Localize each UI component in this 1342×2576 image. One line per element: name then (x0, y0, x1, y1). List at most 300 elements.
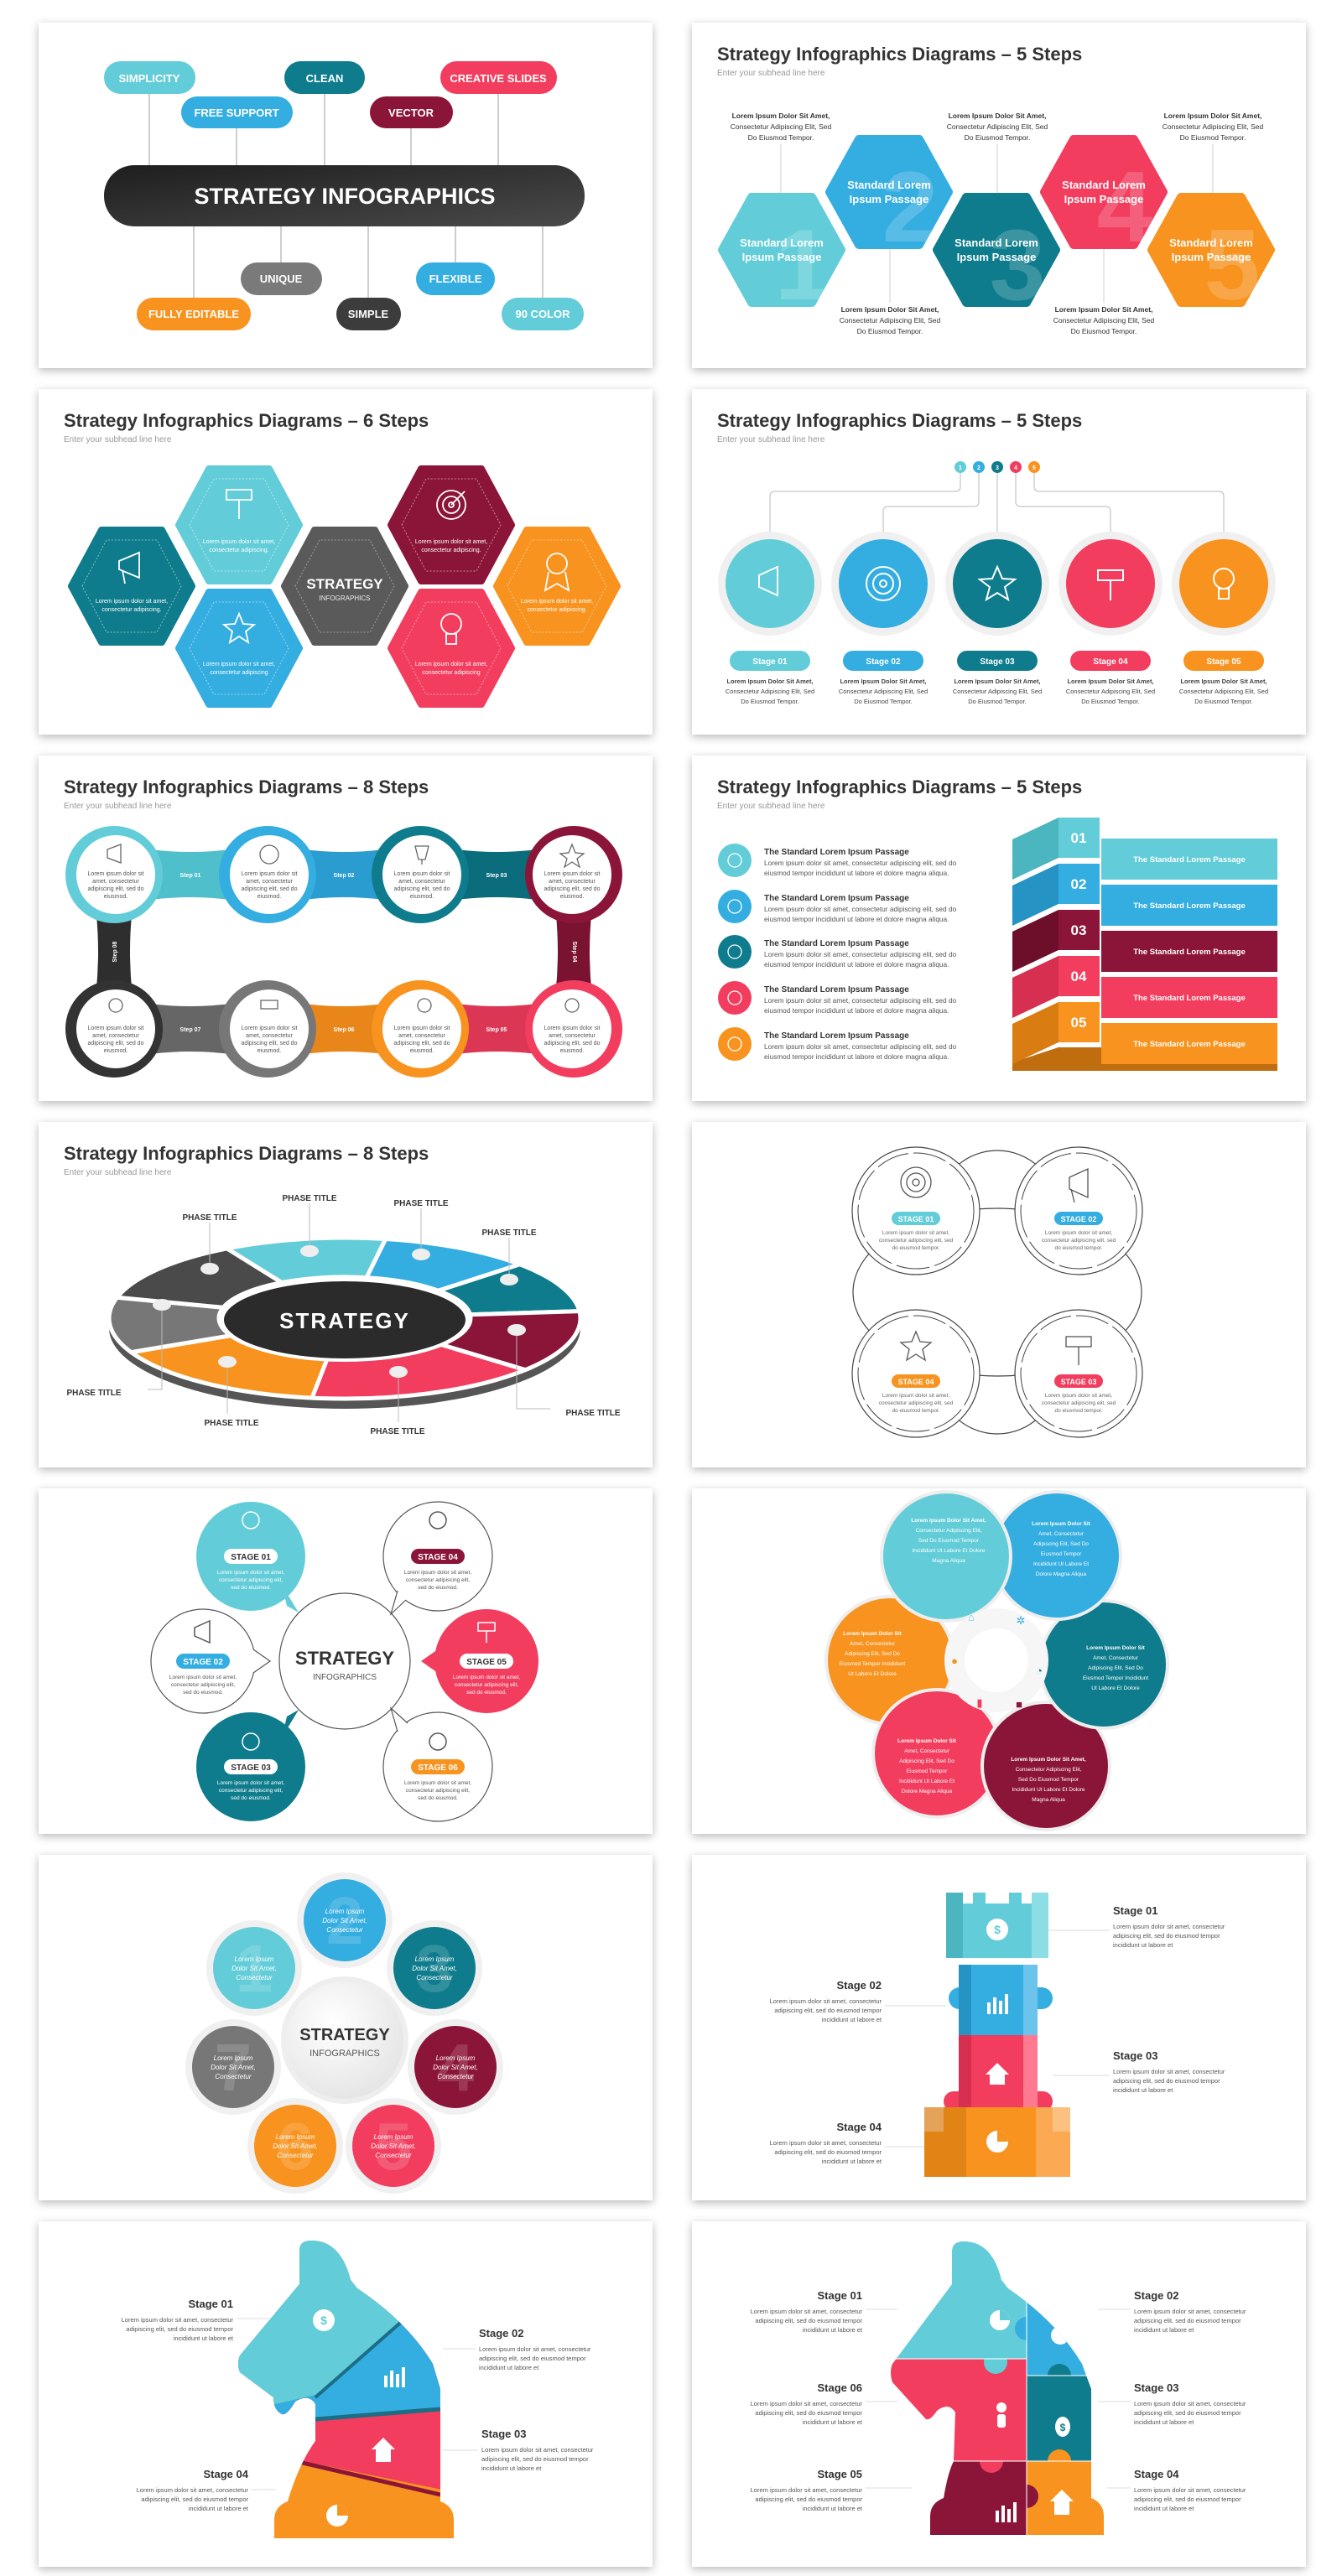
center: strategy (222, 1280, 467, 1360)
slide 10: six overlapping circles (692, 1488, 1306, 1834)
list items: eiusmod tempor incididunt ut labore et dolore magna aliqua. (764, 915, 949, 923)
center circle: STRATEGY (299, 2026, 390, 2044)
list items: Lorem ipsum dolor sit amet, consectetur adipiscing elit, sed do (764, 859, 957, 867)
stage texts: incididunt ut labore et (189, 2505, 249, 2512)
bubble stage 06 (383, 1708, 492, 1821)
petals: Consectetur (277, 2152, 314, 2159)
stage texts: incididunt ut labore et (479, 2364, 539, 2371)
slide 8: outline stages (692, 1122, 1306, 1467)
circle: pink: Adipiscing Elit, Sed Do (899, 1758, 954, 1764)
stage texts: Stage 02 (1134, 2289, 1178, 2302)
hex: pink bulb (391, 592, 512, 704)
connector bands: Step 08 (112, 941, 118, 962)
circle: pink: Eiusmod Tempor (907, 1768, 948, 1774)
circle: orange (826, 1597, 954, 1724)
stage 02: Stage 02 (866, 657, 901, 667)
center circle (281, 1976, 408, 2104)
step circles: Lorem ipsum dolor sit (242, 1026, 298, 1031)
hex: blue star: Lorem ipsum dolor sit amet, (203, 662, 275, 667)
hexagon 3: 3 (990, 209, 1045, 321)
step circles: amet, consectetur (549, 879, 596, 885)
hexagon 1 (722, 197, 841, 321)
bubble stage 02: Lorem ipsum dolor sit amet, (169, 1675, 237, 1680)
circle: dark teal: Eiusmod Tempor Incididunt (1083, 1675, 1148, 1681)
stage 05: Do Eiusmod Tempor. (1194, 698, 1253, 705)
bubble stage 06: Lorem ipsum dolor sit amet, (404, 1780, 471, 1786)
callout texts: Lorem Ipsum Dolor Sit Amet, (841, 305, 939, 314)
hexagon 5 (1152, 197, 1271, 321)
stage texts: adipiscing elit, sed do eiusmod tempor (481, 2455, 589, 2463)
callout texts (731, 112, 1264, 335)
slide 5: 8 steps chain (39, 756, 653, 1101)
stage texts: Lorem ipsum dolor sit amet, consectetur (770, 1997, 882, 2005)
step circles: eiusmod. (410, 894, 434, 900)
title: Enter your subhead line here (64, 1168, 172, 1177)
step circles: eiusmod. (257, 1048, 281, 1054)
circle: orange: Adipiscing Elit, Sed Do (845, 1651, 900, 1657)
stage texts: Lorem ipsum dolor sit amet, consectetur (1134, 2308, 1246, 2315)
stage texts: Lorem ipsum dolor sit amet, consectetur (751, 2486, 863, 2494)
circle: crimson: Lorem Ipsum Dolor Sit Amet, (1011, 1757, 1086, 1763)
petals: Consectetur (416, 1974, 453, 1981)
list items: Lorem ipsum dolor sit amet, consectetur adipiscing elit, sed do (764, 996, 957, 1005)
stage texts: adipiscing elit, sed do eiusmod tempor (1113, 1932, 1220, 1940)
pill: clean (284, 61, 365, 94)
bubble stage 01 (196, 1502, 305, 1613)
bubble stage 04: sed do eiusmod. (418, 1585, 458, 1591)
connector bands (91, 843, 597, 1061)
circle: dark teal (1040, 1601, 1168, 1728)
hex: orange award: Lorem ipsum dolor sit amet, (521, 599, 593, 605)
hex: blue star: consectetur adipiscing (210, 670, 268, 676)
circle: dark teal: Lorem Ipsum Dolor Sit (1086, 1645, 1146, 1651)
hexagon 2: 2 (882, 151, 938, 263)
stage 03: do eiusmod tempor. (1054, 1408, 1103, 1414)
circle: light teal: Sed Do Eiusmod Tempor (918, 1538, 980, 1544)
stage texts: adipiscing elit, sed do eiusmod tempor (755, 2409, 862, 2417)
pill: creative slides: CREATIVE SLIDES (450, 72, 547, 85)
circle: pink: Amet, Consectetur (904, 1748, 950, 1754)
hex: light teal dumbbell: Lorem ipsum dolor sit amet, (203, 539, 275, 545)
stage 01: Do Eiusmod Tempor. (741, 698, 799, 705)
phase markers and labels: PHASE TITLE (565, 1409, 621, 1418)
petals: 5 (375, 2109, 412, 2184)
bubble stage 04: STAGE 04 (418, 1553, 458, 1562)
title (64, 776, 429, 811)
step circles: amet, consectetur (398, 1033, 445, 1039)
pill: unique: UNIQUE (260, 273, 303, 285)
circle: crimson: Sed Do Eiusmod Tempor (1018, 1777, 1079, 1783)
bubble stage 02: STAGE 02 (183, 1658, 223, 1667)
stage texts: Stage 03 (1134, 2381, 1178, 2394)
pill: flexible: FLEXIBLE (429, 273, 482, 285)
pill: simplicity (104, 61, 195, 94)
bubble stage 02: sed do eiusmod. (183, 1690, 223, 1696)
step circles: eiusmod. (560, 894, 584, 900)
circle: orange: Amet, Consectetur (850, 1641, 896, 1647)
circle: orange: Eiusmod Tempor Incididunt (840, 1661, 905, 1667)
title: Strategy Infographics Diagrams – 5 Steps (717, 776, 1082, 797)
step circles: adipiscing elit, sed do (394, 886, 450, 892)
slide 4: 5 steps circles with stages (692, 389, 1306, 735)
stage texts: Stage 05 (818, 2468, 862, 2480)
stage 04: Lorem Ipsum Dolor Sit Amet, (1067, 678, 1154, 685)
pill: 90 color (502, 298, 584, 330)
stage texts: incididunt ut labore et (822, 2158, 882, 2165)
stage 04: Do Eiusmod Tempor. (1081, 698, 1140, 705)
stage 04: Consectetur Adipiscing Elit, Sed (1066, 688, 1155, 695)
step circles: adipiscing elit, sed do (88, 1041, 144, 1046)
petals: 1 (236, 1931, 273, 2006)
hex: orange award (497, 530, 617, 642)
petals: Consectetur (236, 1974, 273, 1981)
title (64, 410, 429, 444)
knight (238, 2241, 454, 2538)
stage texts: adipiscing elit, sed do eiusmod tempor (1134, 2317, 1241, 2324)
callout texts: Consectetur Adipiscing Elit, Sed (731, 122, 832, 131)
bubble stage 02: consectetur adipiscing elit, (171, 1682, 235, 1688)
stage 02: Lorem Ipsum Dolor Sit Amet, (840, 678, 927, 685)
step circles: eiusmod. (104, 894, 127, 900)
stage 01 (852, 1147, 980, 1275)
stage texts: incididunt ut labore et (1134, 2505, 1194, 2512)
petals: 4 (437, 2030, 475, 2105)
stage 02: Consectetur Adipiscing Elit, Sed (839, 688, 928, 695)
list items: Lorem ipsum dolor sit amet, consectetur adipiscing elit, sed do (764, 950, 957, 958)
stage texts: Lorem ipsum dolor sit amet, consectetur (137, 2486, 249, 2494)
stage texts: Lorem ipsum dolor sit amet, consectetur (1134, 2486, 1246, 2494)
step circles: eiusmod. (410, 1048, 434, 1054)
hexagon 4: Standard Lorem (1062, 179, 1146, 191)
stage 04: STAGE 04 (898, 1378, 934, 1386)
rook: $ (994, 1923, 1001, 1936)
circle: crimson (982, 1702, 1110, 1830)
rook (924, 1893, 1070, 2177)
step circles: Lorem ipsum dolor sit (544, 871, 601, 877)
center ring with icons: ◔ (1036, 1665, 1043, 1677)
petals: Consectetur (215, 2073, 252, 2080)
step circles: eiusmod. (560, 1048, 584, 1054)
center ring with icons: ● (951, 1654, 958, 1667)
title: Strategy Infographics Diagrams – 5 Steps (717, 44, 1082, 65)
stage texts: adipiscing elit, sed do eiusmod tempor (126, 2325, 233, 2333)
connector bands: Step 04 (571, 942, 577, 963)
hex: light teal dumbbell (179, 469, 299, 581)
bubble stage 05: Lorem ipsum dolor sit amet, (453, 1675, 520, 1680)
circle: crimson: Magna Aliqua (1032, 1797, 1065, 1803)
pill: vector (370, 96, 453, 128)
title: Enter your subhead line here (64, 802, 172, 811)
connector bands: Step 02 (334, 873, 355, 879)
stage texts: adipiscing elit, sed do eiusmod tempor (755, 2496, 862, 2503)
hex: center strategy: INFOGRAPHICS (320, 595, 370, 602)
stage 03: consectetur adipiscing elit, sed (1042, 1400, 1116, 1406)
step circles: adipiscing elit, sed do (544, 886, 601, 892)
stage texts: incididunt ut labore et (803, 2326, 863, 2334)
pill: fully editable: FULLY EDITABLE (148, 308, 239, 320)
stage 02 (1015, 1147, 1142, 1275)
list items: eiusmod tempor incididunt ut labore et dolore magna aliqua. (764, 1006, 949, 1015)
circle: crimson: Incididunt Ut Labore Et Dolore (1012, 1787, 1085, 1793)
callout texts: Do Eiusmod Tempor. (748, 133, 814, 142)
stage texts: adipiscing elit, sed do eiusmod tempor (141, 2496, 248, 2503)
callout texts: Consectetur Adipiscing Elit, Sed (947, 122, 1048, 131)
hex: crimson target (391, 469, 512, 581)
phase markers and labels: PHASE TITLE (481, 1228, 537, 1238)
center circle: INFOGRAPHICS (309, 2049, 380, 2059)
stage 03: Consectetur Adipiscing Elit, Sed (953, 688, 1042, 695)
hexagon 3: Ipsum Passage (957, 251, 1036, 263)
puzzle knight (891, 2241, 1104, 2535)
step circles: Lorem ipsum dolor sit (88, 871, 144, 877)
hexagon 1: Standard Lorem (740, 236, 824, 249)
list items: Lorem ipsum dolor sit amet, consectetur adipiscing elit, sed do (764, 905, 957, 913)
bubble stage 05: consectetur adipiscing elit, (455, 1682, 518, 1688)
hexagon 2 (830, 139, 949, 263)
slide 7: 8 steps ring (39, 1122, 653, 1467)
callout texts: Consectetur Adipiscing Elit, Sed (1163, 122, 1264, 131)
stage texts: incididunt ut labore et (1113, 2086, 1173, 2094)
circle: blue (993, 1492, 1121, 1619)
3D stack: 01 (1071, 830, 1086, 846)
petals: Dolor Sit Amet, (371, 2142, 416, 2150)
callout texts: Lorem Ipsum Dolor Sit Amet, (732, 112, 830, 120)
step circles: eiusmod. (104, 1048, 127, 1054)
stage texts: Lorem ipsum dolor sit amet, consectetur (122, 2316, 234, 2324)
petals: Dolor Sit Amet, (231, 1965, 277, 1972)
step circles: amet, consectetur (246, 1033, 293, 1039)
stage 03: STAGE 03 (1061, 1378, 1096, 1386)
slide 13: knight chess piece 4 stages (39, 2221, 653, 2567)
hex: center strategy: STRATEGY (306, 576, 383, 592)
number dots: 1 (959, 465, 962, 471)
callout texts: Lorem Ipsum Dolor Sit Amet, (1055, 305, 1152, 314)
step circles: adipiscing elit, sed do (242, 886, 298, 892)
stage 01: do eiusmod tempor. (892, 1245, 940, 1251)
bubble stage 03 (196, 1710, 305, 1821)
stage 04: do eiusmod tempor. (892, 1408, 940, 1414)
stage texts: incididunt ut labore et (803, 2505, 863, 2512)
stage texts: adipiscing elit, sed do eiusmod tempor (1134, 2409, 1241, 2417)
list items: The Standard Lorem Ipsum Passage (764, 939, 909, 948)
title (717, 410, 1082, 444)
stage texts: Lorem ipsum dolor sit amet, consectetur (479, 2345, 591, 2353)
bubble stage 04 (383, 1502, 492, 1614)
callout texts: Do Eiusmod Tempor. (857, 327, 923, 335)
circle: light teal: Incididunt Ut Labore Et Dolore (912, 1548, 986, 1554)
stage texts: Stage 06 (818, 2381, 862, 2394)
stage texts: Lorem ipsum dolor sit amet, consectetur (481, 2446, 594, 2454)
step circles: Lorem ipsum dolor sit (242, 871, 298, 877)
hex: dark teal megaphone: Lorem ipsum dolor sit amet, (96, 599, 168, 605)
stage texts: Lorem ipsum dolor sit amet, consectetur (1113, 1923, 1225, 1930)
circle: pink (873, 1690, 1001, 1817)
list items: The Standard Lorem Ipsum Passage (764, 848, 909, 857)
stage 01: consectetur adipiscing elit, sed (879, 1238, 954, 1244)
circle: orange: Lorem Ipsum Dolor Sit (843, 1631, 902, 1637)
title: Enter your subhead line here (717, 802, 825, 811)
pill: simplicity: SIMPLICITY (119, 72, 180, 85)
hex: crimson target: Lorem ipsum dolor sit amet, (415, 539, 487, 545)
stage texts: Lorem ipsum dolor sit amet, consectetur (1113, 2068, 1225, 2075)
stage 03: Lorem Ipsum Dolor Sit Amet, (954, 678, 1041, 685)
3D stack: 03 (1071, 922, 1086, 938)
stage texts: Stage 01 (189, 2298, 233, 2310)
stage texts: incididunt ut labore et (803, 2418, 863, 2426)
stage texts: Stage 02 (479, 2327, 523, 2340)
callout texts: Consectetur Adipiscing Elit, Sed (840, 316, 941, 325)
stage 02: consectetur adipiscing elit, sed (1042, 1238, 1116, 1244)
stage 01: Stage 01 (752, 657, 788, 667)
circle: dark teal: Amet, Consectetur (1093, 1655, 1139, 1661)
step circles: adipiscing elit, sed do (544, 1041, 601, 1046)
stage texts: adipiscing elit, sed do eiusmod tempor (755, 2317, 862, 2324)
stage texts: Stage 04 (204, 2468, 249, 2480)
stage texts: adipiscing elit, sed do eiusmod tempor (774, 2007, 882, 2014)
bubble stage 02 (151, 1609, 270, 1713)
stage texts: incididunt ut labore et (1134, 2326, 1194, 2334)
bubble stage 06: sed do eiusmod. (418, 1795, 458, 1801)
center ring with icons: ■ (1016, 1698, 1022, 1711)
connector bands: Step 07 (180, 1027, 201, 1033)
title: Strategy Infographics Diagrams – 8 Steps (64, 1143, 429, 1164)
phase markers and labels: PHASE TITLE (393, 1199, 449, 1208)
step circles: Lorem ipsum dolor sit (88, 1026, 144, 1031)
petals: Lorem Ipsum (325, 1908, 365, 1915)
center circle: STRATEGY (295, 1648, 394, 1669)
hexagon 2: Ipsum Passage (850, 193, 928, 205)
circle: blue: Lorem Ipsum Dolor Sit (1032, 1521, 1091, 1527)
callout texts: Lorem Ipsum Dolor Sit Amet, (949, 112, 1046, 120)
hexagon 5: Ipsum Passage (1172, 251, 1251, 263)
callout texts: Consectetur Adipiscing Elit, Sed (1053, 316, 1155, 325)
stage 04: consectetur adipiscing elit, sed (879, 1400, 954, 1406)
stage 01: STAGE 01 (898, 1215, 934, 1223)
list items: The Standard Lorem Ipsum Passage (764, 985, 909, 995)
circle: pink: Dolore Magna Aliqua (902, 1789, 953, 1794)
step circles: adipiscing elit, sed do (242, 1041, 298, 1046)
bubble stage 05: STAGE 05 (466, 1658, 507, 1667)
stage 05: Lorem Ipsum Dolor Sit Amet, (1180, 678, 1267, 685)
knight: $ (320, 2314, 327, 2327)
hexagon 4: 4 (1097, 151, 1153, 263)
circle: pink: Lorem Ipsum Dolor Sit (897, 1738, 957, 1744)
callout texts: Do Eiusmod Tempor. (1071, 327, 1137, 335)
bubble stage 06: consectetur adipiscing elit, (406, 1788, 470, 1794)
petals: 6 (277, 2109, 314, 2184)
phase markers and labels: PHASE TITLE (204, 1419, 259, 1428)
petals (185, 1872, 503, 2194)
title (717, 776, 1082, 811)
phase markers and labels: PHASE TITLE (66, 1389, 122, 1398)
stage texts (751, 2289, 1246, 2512)
stage 03 (1015, 1310, 1142, 1437)
circle: blue: Adipiscing Elit, Sed Do (1033, 1541, 1089, 1547)
step circles: Lorem ipsum dolor sit (394, 1026, 450, 1031)
hexagon 2: Standard Lorem (847, 179, 931, 191)
phase markers and labels: PHASE TITLE (182, 1213, 237, 1223)
stage 03: Do Eiusmod Tempor. (968, 698, 1027, 705)
petals: Lorem Ipsum (235, 1955, 274, 1963)
pill: free support (181, 96, 293, 128)
petals: Consectetur (437, 2073, 474, 2080)
stage texts: Lorem ipsum dolor sit amet, consectetur (751, 2400, 863, 2407)
background outline shapes (853, 1150, 1142, 1434)
3D stack (1012, 818, 1277, 1071)
list items: eiusmod tempor incididunt ut labore et dolore magna aliqua. (764, 1052, 949, 1061)
stage texts (770, 1904, 1225, 2165)
pill: 90 color: 90 COLOR (515, 308, 570, 320)
petals: Consectetur (375, 2152, 412, 2159)
number dots: 2 (977, 465, 980, 471)
connector bands: Step 05 (486, 1027, 507, 1033)
stage texts: Lorem ipsum dolor sit amet, consectetur (751, 2308, 863, 2315)
stage texts (122, 2298, 594, 2512)
stage 04 (1059, 532, 1163, 705)
title: Enter your subhead line here (717, 69, 825, 78)
petals: Dolor Sit Amet, (433, 2064, 478, 2071)
center ring with icons: ▮ (976, 1696, 983, 1709)
pill: simple: SIMPLE (348, 308, 389, 320)
connector bands: Step 01 (180, 873, 201, 879)
step circles: amet, consectetur (549, 1033, 596, 1039)
hex: light teal dumbbell: consectetur adipiscing. (209, 548, 269, 553)
stage 04 (852, 1310, 980, 1437)
callout texts: Do Eiusmod Tempor. (965, 133, 1030, 142)
hex: center strategy (284, 530, 405, 642)
title: Enter your subhead line here (717, 435, 825, 444)
step circles: amet, consectetur (92, 1033, 139, 1039)
step circles: Lorem ipsum dolor sit (544, 1026, 601, 1031)
circle: blue: Eiusmod Tempor (1041, 1551, 1082, 1557)
pill: creative slides (440, 61, 557, 94)
circle: light teal: Consectetur Adipiscing Elit, (916, 1528, 982, 1534)
number dots: 5 (1033, 465, 1036, 471)
bubble stage 03: STAGE 03 (231, 1763, 271, 1773)
stage 02: STAGE 02 (1061, 1215, 1096, 1223)
stage texts: Stage 03 (1113, 2049, 1157, 2062)
stage 05 (1172, 532, 1276, 705)
3D stack: The Standard Lorem Passage (1133, 1040, 1246, 1049)
bubble stage 01: STAGE 01 (231, 1553, 271, 1562)
circle: orange: Ut Labore Et Dolore (848, 1671, 897, 1677)
stage texts: Lorem ipsum dolor sit amet, consectetur (1134, 2400, 1246, 2407)
number dots: 3 (996, 465, 999, 471)
petals: Lorem Ipsum (214, 2054, 253, 2062)
list items: eiusmod tempor incididunt ut labore et dolore magna aliqua. (764, 960, 949, 969)
stage texts: Stage 04 (1134, 2468, 1179, 2480)
bubble stage 04: Lorem ipsum dolor sit amet, (404, 1570, 471, 1576)
petals: Dolor Sit Amet, (412, 1965, 457, 1972)
step circles: Lorem ipsum dolor sit (394, 871, 450, 877)
pill: unique (241, 262, 322, 295)
bubble stage 01: Lorem ipsum dolor sit amet, (217, 1570, 284, 1576)
center ring with icons (944, 1608, 1048, 1712)
list items: eiusmod tempor incididunt ut labore et dolore magna aliqua. (764, 869, 949, 877)
stage 01: Lorem ipsum dolor sit amet, (882, 1230, 949, 1236)
stage 02: Do Eiusmod Tempor. (854, 698, 913, 705)
center: strategy: STRATEGY (279, 1308, 410, 1333)
circle: dark teal: Ut Labore Et Dolore (1091, 1685, 1140, 1691)
hexagon 3: Standard Lorem (954, 236, 1038, 249)
title (717, 44, 1082, 78)
circle: crimson: Consectetur Adipiscing Elit, (1016, 1767, 1082, 1773)
step circles (65, 826, 622, 1078)
petals: Lorem Ipsum (436, 2054, 476, 2062)
petals: Dolor Sit Amet, (273, 2142, 318, 2150)
circle: light teal: Lorem Ipsum Dolor Sit Amet, (911, 1518, 986, 1524)
puzzle knight: $ (1060, 2422, 1066, 2433)
